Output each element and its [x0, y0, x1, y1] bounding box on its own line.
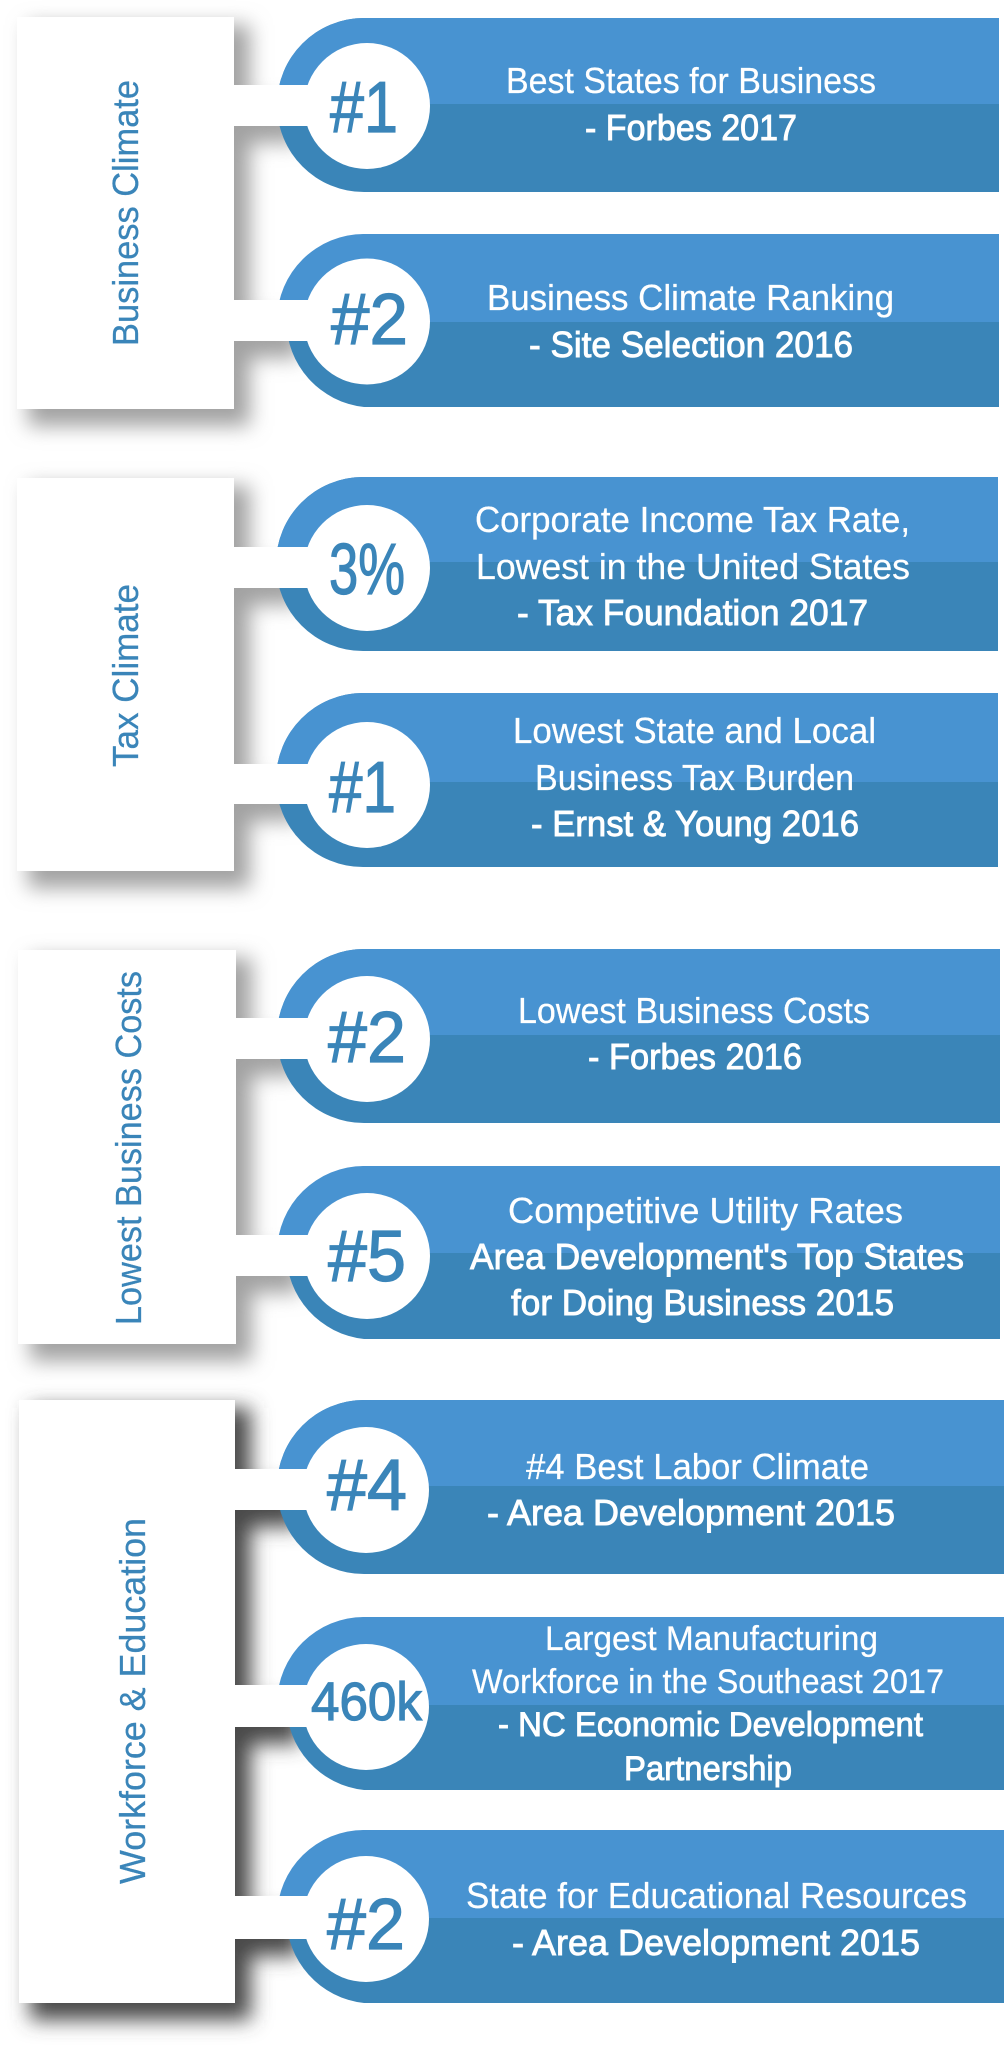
bar text — [513, 710, 876, 844]
bar text: - Area Development 2015 — [512, 1922, 920, 1963]
ranking bar: Best States for Business — [234, 18, 999, 192]
bar text: Business Tax Burden — [535, 757, 854, 798]
bar text: Best States for Business — [506, 60, 876, 101]
bar text — [487, 277, 894, 365]
rank number: #2 — [328, 998, 406, 1078]
bar text: Lowest in the United States — [476, 546, 910, 587]
bar text — [518, 990, 870, 1077]
ranking bar: Corporate Income Tax Rate — [234, 477, 998, 651]
bar text: State for Educational Resources — [466, 1875, 967, 1916]
bar text: #4 Best Labor Climate — [526, 1446, 869, 1487]
section: Business Climate — [17, 17, 999, 426]
bar text: - Area Development 2015 — [487, 1492, 895, 1533]
ranking bar: Best Labor Climate — [235, 1400, 1004, 1574]
panel: Tax Climate — [17, 478, 300, 888]
bar text: - NC Economic Development — [498, 1706, 924, 1744]
bar text — [487, 1446, 895, 1533]
rank number: #5 — [328, 1217, 406, 1297]
ranking bar: Competitive Utility Rates — [236, 1166, 1000, 1339]
panel: Business Climate — [17, 17, 300, 426]
bar text: Lowest State and Local — [513, 710, 876, 751]
bar text: - Site Selection 2016 — [529, 324, 853, 365]
ranking bar: Largest Manufacturing Workforce — [235, 1617, 1004, 1790]
bar text — [475, 499, 910, 633]
bar text: - Forbes 2017 — [585, 107, 797, 148]
bar text: Workforce in the Southeast 2017 — [472, 1663, 944, 1701]
ranking bar: Lowest State and Local Business Tax Burden — [234, 693, 998, 867]
bar text: Area Development's Top States — [470, 1236, 964, 1277]
panel label: Business Climate — [105, 80, 146, 346]
panel label: Lowest Business Costs — [108, 971, 149, 1325]
bar text: Corporate Income Tax Rate, — [475, 499, 910, 540]
bar text: Lowest Business Costs — [518, 990, 870, 1031]
section: Workforce & Education — [19, 1400, 1004, 2020]
bar text — [466, 1875, 967, 1963]
bar text: for Doing Business 2015 — [511, 1282, 894, 1323]
bar text — [506, 60, 876, 148]
bar text: - Forbes 2016 — [588, 1036, 802, 1077]
rank number: 460k — [311, 1672, 423, 1732]
rank number: #1 — [329, 748, 396, 828]
ranking bar: State for Educational Resources — [235, 1830, 1004, 2003]
panel: Workforce & Education — [19, 1400, 300, 2020]
rank number: #1 — [330, 68, 398, 148]
rank number: #2 — [327, 1885, 405, 1965]
ranking bar: Lowest Business Costs — [236, 949, 1000, 1123]
ranking bar: Business Climate Ranking — [234, 234, 999, 407]
bar text — [472, 1620, 944, 1788]
panel label: Tax Climate — [105, 584, 146, 767]
rank number: #4 — [327, 1446, 407, 1526]
bar text: - Ernst & Young 2016 — [531, 803, 859, 844]
bar text: Largest Manufacturing — [545, 1620, 878, 1658]
bar text: - Tax Foundation 2017 — [517, 592, 868, 633]
bar text — [470, 1190, 964, 1323]
section: Tax Climate — [17, 477, 998, 888]
rank number: 3% — [329, 530, 405, 610]
section: Lowest Business Costs — [18, 949, 1000, 1361]
panel: Lowest Business Costs — [18, 950, 300, 1361]
bar text: Business Climate Ranking — [487, 277, 894, 318]
rank number: #2 — [331, 280, 408, 360]
bar text: Partnership — [624, 1750, 792, 1788]
bar text: Competitive Utility Rates — [508, 1190, 903, 1231]
panel label: Workforce & Education — [112, 1518, 153, 1884]
